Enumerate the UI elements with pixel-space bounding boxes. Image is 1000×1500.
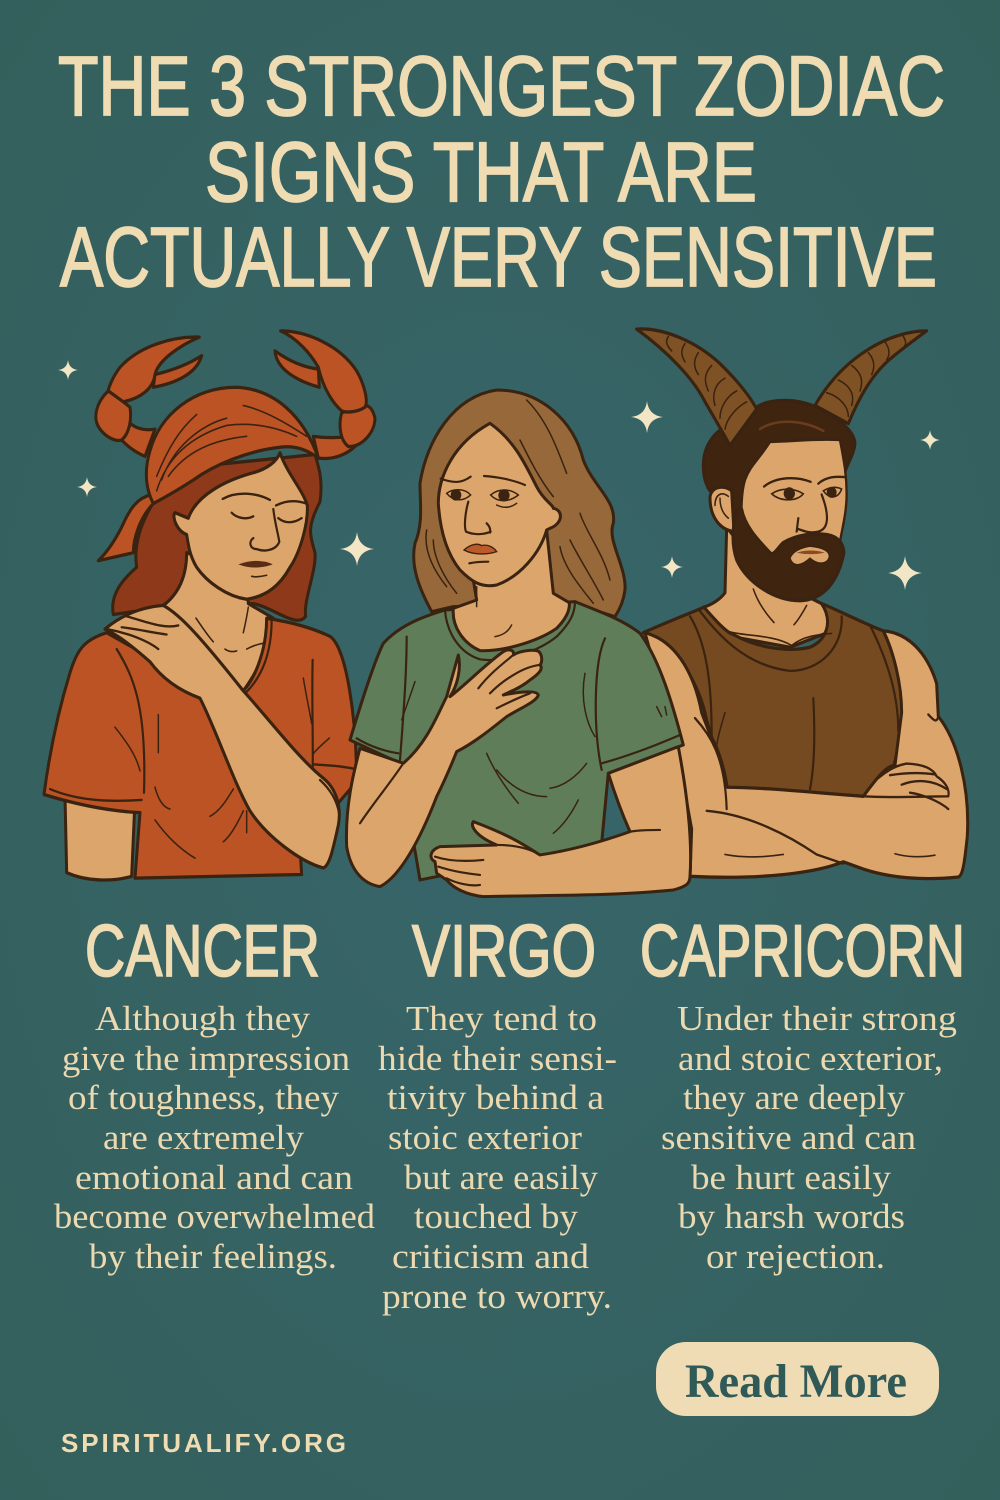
text block: Cancer description: give the impression bbox=[62, 1039, 350, 1078]
text block: Capricorn description: or rejection. bbox=[706, 1237, 885, 1276]
text block: Virgo description: They tend to bbox=[406, 999, 597, 1038]
button: Read More: Read More bbox=[685, 1355, 907, 1408]
text block: Virgo description: tivity behind a bbox=[387, 1078, 604, 1117]
red t-shirt bbox=[44, 618, 357, 878]
text block: Capricorn description: Under their strong bbox=[677, 999, 957, 1038]
hand on chest and arm bbox=[346, 650, 542, 887]
green t-shirt bbox=[350, 602, 683, 880]
sign name: Virgo: VIRGO bbox=[412, 911, 596, 992]
figure: Capricorn man with horns bbox=[637, 329, 968, 879]
button: Read More bbox=[656, 1342, 939, 1416]
text block: Cancer description: by their feelings. bbox=[89, 1237, 337, 1276]
text block: Capricorn description: be hurt easily bbox=[691, 1158, 892, 1197]
text block: Virgo description bbox=[378, 999, 617, 1316]
title bbox=[58, 39, 945, 304]
text block: Capricorn description: and stoic exterior, bbox=[678, 1039, 943, 1078]
text block: Cancer description bbox=[54, 999, 376, 1276]
text block: Virgo description: criticism and bbox=[392, 1237, 590, 1276]
text block: Cancer description: Although they bbox=[95, 999, 311, 1038]
text block: Capricorn description: they are deeply bbox=[683, 1078, 906, 1117]
headscarf bbox=[146, 387, 318, 504]
tank top bbox=[643, 589, 903, 796]
text block: Virgo description: but are easily bbox=[404, 1158, 599, 1197]
arm and hand on shoulder bbox=[105, 605, 339, 868]
neck bbox=[703, 527, 837, 647]
footer: website: SPIRITUALIFY.ORG bbox=[61, 1428, 346, 1458]
figure: Virgo woman with hand on chest bbox=[346, 390, 691, 897]
hair bbox=[414, 390, 625, 617]
sign name: Cancer: CANCER bbox=[85, 911, 320, 992]
figure: Cancer woman with claws bbox=[44, 331, 375, 880]
face bbox=[438, 423, 560, 586]
left arm bbox=[65, 796, 135, 880]
text block: Capricorn description: by harsh words bbox=[678, 1197, 905, 1236]
crossed arms bbox=[645, 631, 968, 879]
text block: Capricorn description: sensitive and can bbox=[661, 1118, 916, 1157]
neck bbox=[453, 530, 569, 651]
hair bbox=[113, 455, 321, 620]
text block: Cancer description: are extremely bbox=[103, 1118, 305, 1157]
face bbox=[174, 453, 307, 599]
text block: Capricorn description bbox=[661, 999, 957, 1276]
text block: Virgo description: touched by bbox=[414, 1197, 579, 1236]
text block: Virgo description: hide their sensi- bbox=[378, 1039, 617, 1078]
right horn bbox=[815, 331, 927, 424]
text block: Cancer description: emotional and can bbox=[75, 1158, 353, 1197]
text block: Cancer description: become overwhelmed bbox=[54, 1197, 376, 1236]
sparkles bbox=[58, 360, 940, 590]
crab claws bbox=[96, 331, 375, 459]
text block: Virgo description: prone to worry. bbox=[382, 1277, 612, 1316]
lower arm and hand on stomach bbox=[360, 747, 691, 897]
headscarf knot bbox=[98, 495, 155, 561]
text block: Cancer description: of toughness, they bbox=[68, 1078, 340, 1117]
text block: Virgo description: stoic exterior bbox=[388, 1118, 582, 1157]
neck bbox=[163, 553, 273, 691]
head: hair, horn, ear, face, beard bbox=[637, 329, 855, 601]
title: SIGNS THAT ARE bbox=[205, 125, 757, 219]
